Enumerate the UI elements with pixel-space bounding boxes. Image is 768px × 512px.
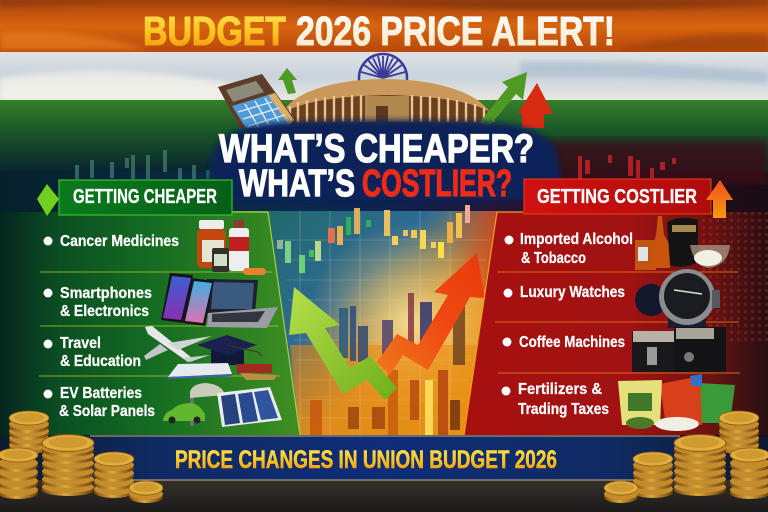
arrow: red up-trend arrow xyxy=(377,253,485,375)
icon: alcohol and tobacco products xyxy=(635,216,730,270)
icon: medicine bottles xyxy=(197,220,266,275)
background: flag orange band xyxy=(0,0,768,52)
chart: candlesticks xyxy=(277,205,470,273)
footer banner: PRICE CHANGES IN UNION BUDGET 2026 xyxy=(175,446,557,474)
header: getting costlier xyxy=(524,179,733,218)
icon: green up-down arrow xyxy=(37,184,59,216)
heading: what's costlier xyxy=(239,163,512,205)
item: smartphones and electronics: & Electronics xyxy=(60,303,149,320)
icon: fertilizer sacks xyxy=(618,374,735,431)
background: flag white band xyxy=(0,52,768,100)
item: smartphones and electronics xyxy=(44,285,152,320)
title: budget 2026 price alert: 2026 PRICE ALERT! xyxy=(296,8,615,54)
item: EV batteries and solar panels xyxy=(44,385,155,420)
item: smartphones and electronics: Smartphones xyxy=(60,285,152,302)
chart: city skyline xyxy=(310,293,465,435)
coins: left stacks xyxy=(0,411,163,503)
heading: what's cheaper: WHAT’S CHEAPER? xyxy=(219,127,534,171)
ground: bottom strip xyxy=(0,480,768,512)
item: travel and education: Travel xyxy=(60,335,101,352)
item: imported alcohol and tobacco xyxy=(504,231,633,267)
icon: luxury watch xyxy=(635,269,720,328)
footer banner xyxy=(0,436,768,480)
item: coffee machines: Coffee Machines xyxy=(519,334,625,351)
icon: orange up arrow xyxy=(706,180,733,218)
emblem: Ashoka chakra xyxy=(359,54,407,102)
divider lines xyxy=(39,272,280,376)
background: flag green band xyxy=(0,100,768,172)
item: fertilizers and trading taxes: Fertilizers & xyxy=(518,381,602,398)
icon: coffee machines xyxy=(632,327,726,372)
item: travel and education: & Education xyxy=(60,353,141,370)
divider lines xyxy=(495,272,740,373)
item: fertilizers and trading taxes xyxy=(502,381,609,418)
icon: large green arrow xyxy=(480,72,527,128)
coins: right stacks xyxy=(604,411,768,503)
icon: red arrow xyxy=(518,83,553,128)
item: imported alcohol and tobacco: & Tobacco xyxy=(521,250,586,267)
icon: phones and laptop xyxy=(161,273,278,328)
header: getting cheaper xyxy=(37,180,232,216)
background: red tint right xyxy=(540,140,768,185)
icon: small green arrow xyxy=(278,68,297,94)
panel: getting cheaper xyxy=(0,211,300,435)
icon: EV car, charger and solar panels xyxy=(163,383,282,427)
item: imported alcohol and tobacco: Imported Alcohol xyxy=(520,231,633,248)
item: travel and education xyxy=(44,335,141,370)
panel: getting costlier xyxy=(464,212,768,435)
item: fertilizers and trading taxes: Trading Taxes xyxy=(518,401,609,418)
icon: calculator xyxy=(218,74,298,128)
item: cancer medicines: Cancer Medicines xyxy=(60,233,179,250)
heading: what's costlier: COSTLIER? xyxy=(362,163,512,205)
icon: parliament building xyxy=(279,79,495,124)
item: EV batteries and solar panels: EV Batteries xyxy=(60,385,142,402)
icon: airplane, graduation cap and books xyxy=(144,326,277,380)
title: budget 2026 price alert xyxy=(143,8,615,54)
header: getting cheaper: GETTING CHEAPER xyxy=(73,186,217,208)
item: EV batteries and solar panels: & Solar Panels xyxy=(59,403,155,420)
arrow: green down-trend arrow xyxy=(289,287,397,400)
panel: center chart xyxy=(268,205,497,435)
title: budget 2026 price alert: BUDGET xyxy=(143,8,286,54)
candlesticks: right backdrop xyxy=(578,155,676,180)
heading: what's costlier: WHAT’S xyxy=(239,163,355,205)
candlesticks: left backdrop xyxy=(75,150,210,180)
item: luxury watches: Luxury Watches xyxy=(520,284,625,301)
header: getting costlier: GETTING COSTLIER xyxy=(537,186,697,208)
heading backdrop: navy panel xyxy=(205,120,565,200)
